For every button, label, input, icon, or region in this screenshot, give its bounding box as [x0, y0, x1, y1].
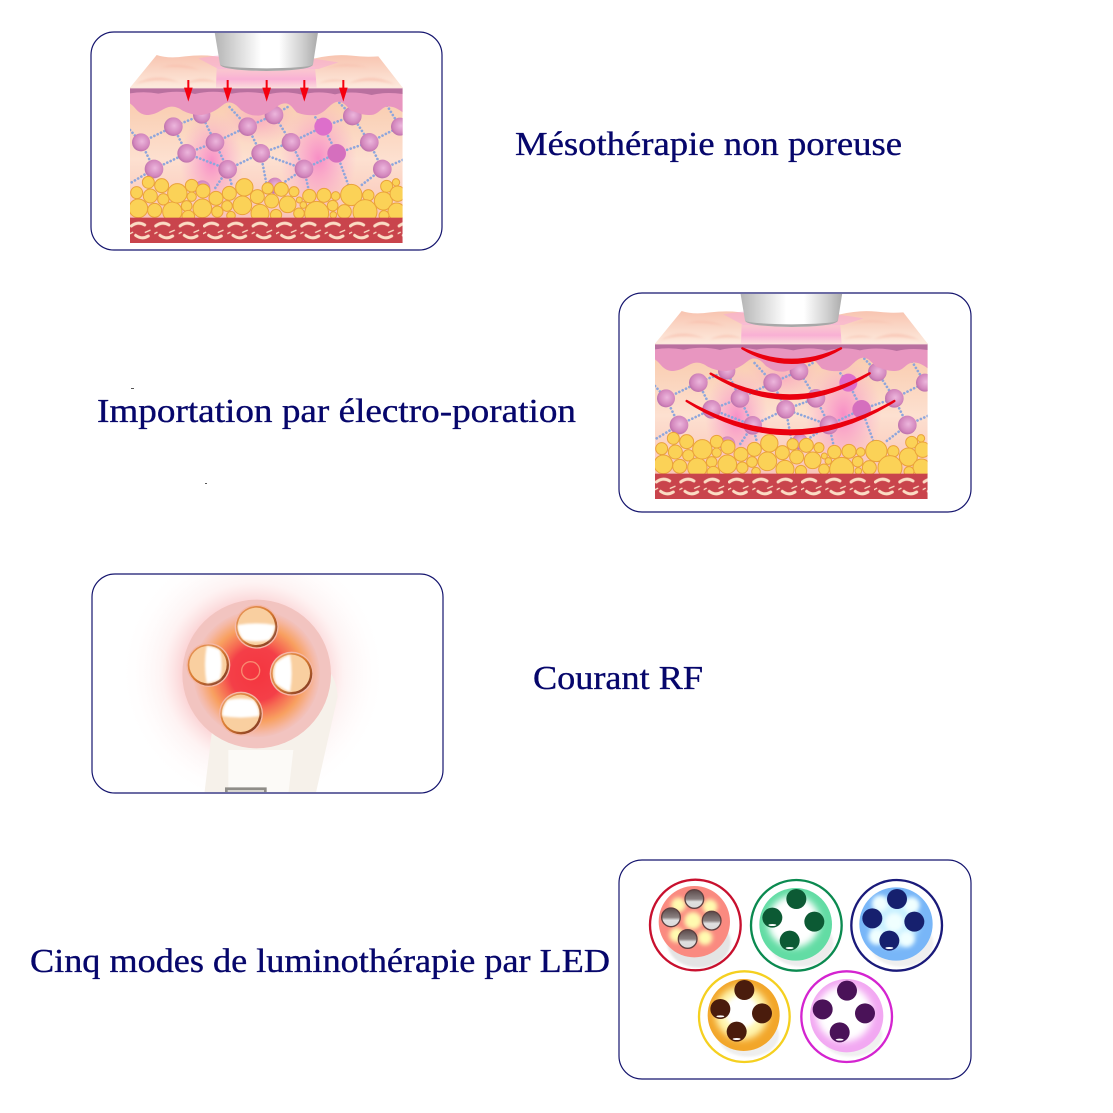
electrode left [186, 643, 230, 687]
LED blue [851, 880, 942, 971]
panel border [619, 860, 971, 1079]
panel border [91, 32, 442, 250]
label: electroporation: Importation par électro-poration [97, 393, 576, 430]
red downward arrows [184, 80, 348, 102]
electrode top [235, 605, 279, 649]
red wave arcs [687, 348, 894, 434]
LED purple [801, 971, 892, 1062]
panel: RF current [91, 573, 444, 794]
stray marks [131, 388, 207, 484]
LED red [650, 880, 741, 970]
device head with red glow [155, 576, 352, 792]
electrode bottom [219, 692, 263, 736]
panel: five LED modes [619, 860, 971, 1079]
LED yellow [699, 971, 790, 1062]
panel: electroporation [619, 288, 971, 512]
device handle [204, 670, 338, 794]
skin cross-section illustration with probe [654, 288, 934, 499]
electrode right [270, 652, 314, 696]
label: mesotherapy: Mésothérapie non poreuse [515, 126, 902, 163]
panel: non-porous mesotherapy [91, 32, 442, 250]
LED green [751, 880, 842, 971]
skin cross-section illustration [129, 32, 409, 243]
panel border [619, 293, 971, 512]
label: RF current: Courant RF [533, 660, 703, 697]
label: LED modes: Cinq modes de luminothérapie par LED [30, 943, 610, 980]
panel border [92, 574, 443, 793]
